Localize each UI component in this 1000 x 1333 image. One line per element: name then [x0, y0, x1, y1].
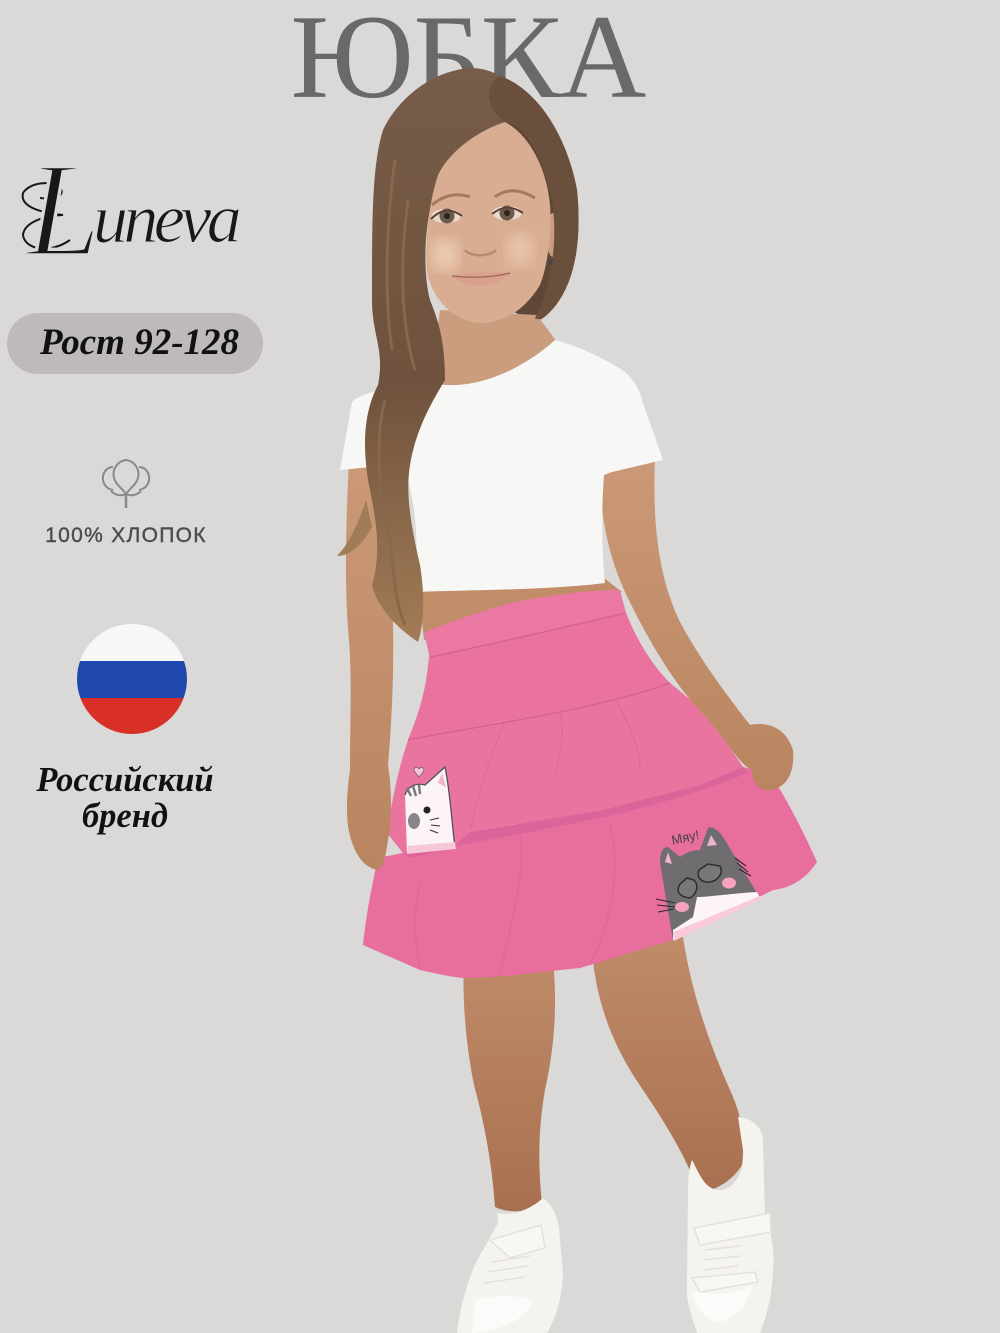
logo: Luneva: [22, 136, 240, 270]
midriff: [418, 575, 622, 640]
waistband seam: [408, 613, 670, 740]
face: [426, 122, 554, 323]
white t-shirt: [340, 340, 663, 592]
waistband: [424, 590, 626, 658]
hair highlight strands: [379, 160, 415, 625]
print: white cat: [405, 767, 456, 854]
logo flourish: [23, 183, 70, 249]
shoe: left: [457, 1198, 563, 1333]
neck: [430, 310, 557, 400]
ear: [546, 213, 560, 257]
lower tier folds: [415, 825, 615, 972]
lower tier: [363, 767, 817, 978]
brand origin text: бренд: [82, 797, 168, 835]
print: grey cat: Мяу!: [670, 827, 701, 848]
legs: [463, 930, 743, 1211]
hair main: [365, 68, 575, 642]
brand origin text: [36, 761, 214, 835]
icon: cotton: [102, 459, 150, 508]
upper tier folds: [470, 700, 640, 830]
height badge: [7, 313, 263, 374]
upper tier: [387, 683, 743, 853]
arm right: [600, 458, 793, 790]
brand origin text: Российский: [36, 761, 214, 799]
shoe: right: [687, 1117, 774, 1333]
hair right lock: [489, 76, 579, 319]
cotton label: 100% ХЛОПОК: [45, 524, 207, 547]
tier shadow: [403, 767, 748, 858]
skirt: [363, 590, 817, 978]
arm left: [346, 460, 393, 870]
logo wordmark: uneva: [93, 181, 240, 258]
print: grey cat: [656, 827, 761, 941]
hair wisp: [337, 500, 372, 556]
skirt yoke: [408, 595, 670, 740]
height badge: Рост 92-128: [40, 322, 239, 363]
hair back: [480, 90, 579, 320]
icon: Russian flag: [77, 624, 187, 734]
